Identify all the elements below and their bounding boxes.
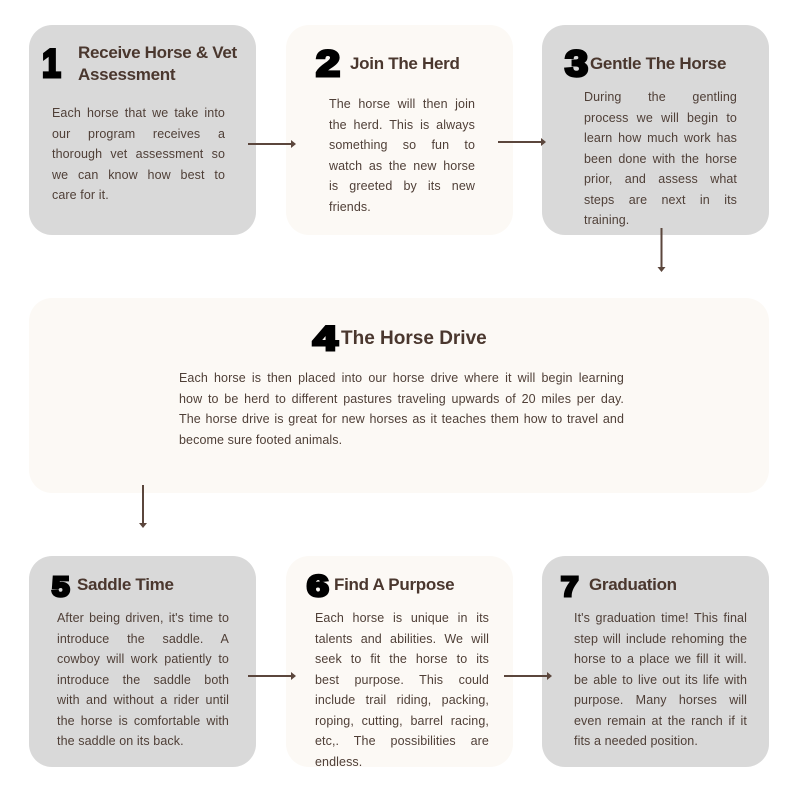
text: step 4: become sure footed animals.	[179, 432, 342, 446]
heading: step 4: The Horse Drive	[341, 328, 487, 349]
text: step 3: process we will begin to	[584, 110, 737, 124]
text: step 6: talents and abilities. We will	[315, 632, 489, 646]
text: step 2: the herd. This is always	[329, 118, 475, 132]
text: step 3: been done with the horse	[584, 152, 737, 166]
text: step 7: be able to live out its life with	[574, 672, 747, 686]
text: step 2: is greeted by its new	[329, 179, 475, 193]
text: step 2: something so fun to	[329, 138, 475, 152]
text: step 6: best purpose. This could	[315, 672, 489, 686]
text: step 3: steps are next in its	[584, 192, 737, 206]
text: step 2: watch as the new horse	[329, 158, 475, 172]
heading: step 5: Saddle Time	[77, 575, 174, 594]
text: step 7: horse to a place we fill it will.	[574, 652, 747, 666]
text: step 1	[52, 106, 225, 202]
text: step 3	[584, 90, 737, 227]
text: step 4: The horse drive is great for new horses as it teaches them how to travel and	[179, 412, 624, 426]
text: step 2: The horse will then join	[329, 97, 475, 111]
text: step 1: thorough vet assessment so	[52, 147, 225, 161]
number 4: 4	[313, 320, 338, 358]
text: step 5: introduce the saddle. A	[57, 632, 229, 646]
panel: step 3	[542, 25, 769, 235]
panel: step 1	[29, 25, 256, 235]
text: step 3: During the gentling	[584, 90, 737, 104]
text: step 3: learn how much work has	[584, 131, 737, 145]
text: step 7: purpose. Many horses will	[574, 693, 747, 707]
text: step 4: how to be herd to different pastures traveling upwards of 20 miles per day.	[179, 392, 624, 406]
text: step 2	[329, 97, 475, 214]
text: step 2: friends.	[329, 200, 371, 214]
text: step 6	[315, 611, 489, 768]
text: step 7	[574, 611, 747, 748]
text: step 6: etc,. The possibilities are	[315, 734, 489, 748]
number 3: 3	[565, 43, 588, 84]
number 1: 1	[42, 42, 61, 86]
heading: step 1	[78, 43, 237, 84]
text: step 1: we can know how best to	[52, 168, 225, 182]
number 5: 5	[52, 571, 69, 602]
text: step 5: the horse is comfortable with	[57, 714, 229, 728]
number 7: 7	[561, 571, 578, 602]
panel: step 4	[29, 298, 769, 493]
text: step 1: our program receives a	[52, 126, 225, 140]
text: step 4: Each horse is then placed into our horse drive where it will begin learning	[179, 371, 624, 385]
text: step 6: endless.	[315, 754, 362, 768]
panel: step 7	[542, 556, 769, 767]
heading: step 2: Join The Herd	[350, 54, 460, 73]
text: step 5: the saddle on its back.	[57, 734, 184, 748]
text: step 4	[179, 371, 624, 446]
text: step 5: After being driven, it's time to	[57, 611, 229, 625]
text: step 6: roping, cutting, barrel racing,	[315, 714, 489, 728]
text: step 6: include trail riding, packing,	[315, 693, 489, 707]
text: step 1: care for it.	[52, 188, 109, 202]
text: step 5	[57, 611, 229, 748]
heading: step 7: Graduation	[589, 575, 677, 594]
heading: step 3: Gentle The Horse	[590, 54, 726, 73]
text: step 5: introduce the saddle both	[57, 672, 229, 686]
text: step 7: fits a needed position.	[574, 734, 698, 748]
text: step 5: with and without a rider until	[57, 693, 229, 707]
number 6: 6	[307, 570, 329, 603]
heading: step 1: Assessment	[78, 65, 175, 84]
text: step 7: step will include rehoming the	[574, 632, 747, 646]
text: step 3: training.	[584, 213, 629, 227]
heading: step 6: Find A Purpose	[334, 575, 454, 594]
heading: step 1: Receive Horse & Vet	[78, 43, 237, 62]
text: step 3: prior, and assess what	[584, 172, 737, 186]
text: step 7: even remain at the ranch if it	[574, 714, 747, 728]
text: step 1: Each horse that we take into	[52, 106, 225, 120]
text: step 7: It's graduation time! This final	[574, 611, 747, 625]
panel: step 5	[29, 556, 256, 767]
text: step 6: seek to fit the horse to its	[315, 652, 489, 666]
text: step 6: Each horse is unique in its	[315, 611, 489, 625]
panel: step 2	[286, 25, 513, 235]
number 2: 2	[316, 43, 340, 84]
panel: step 6	[286, 556, 513, 767]
text: step 5: cowboy will work patiently to	[57, 652, 229, 666]
